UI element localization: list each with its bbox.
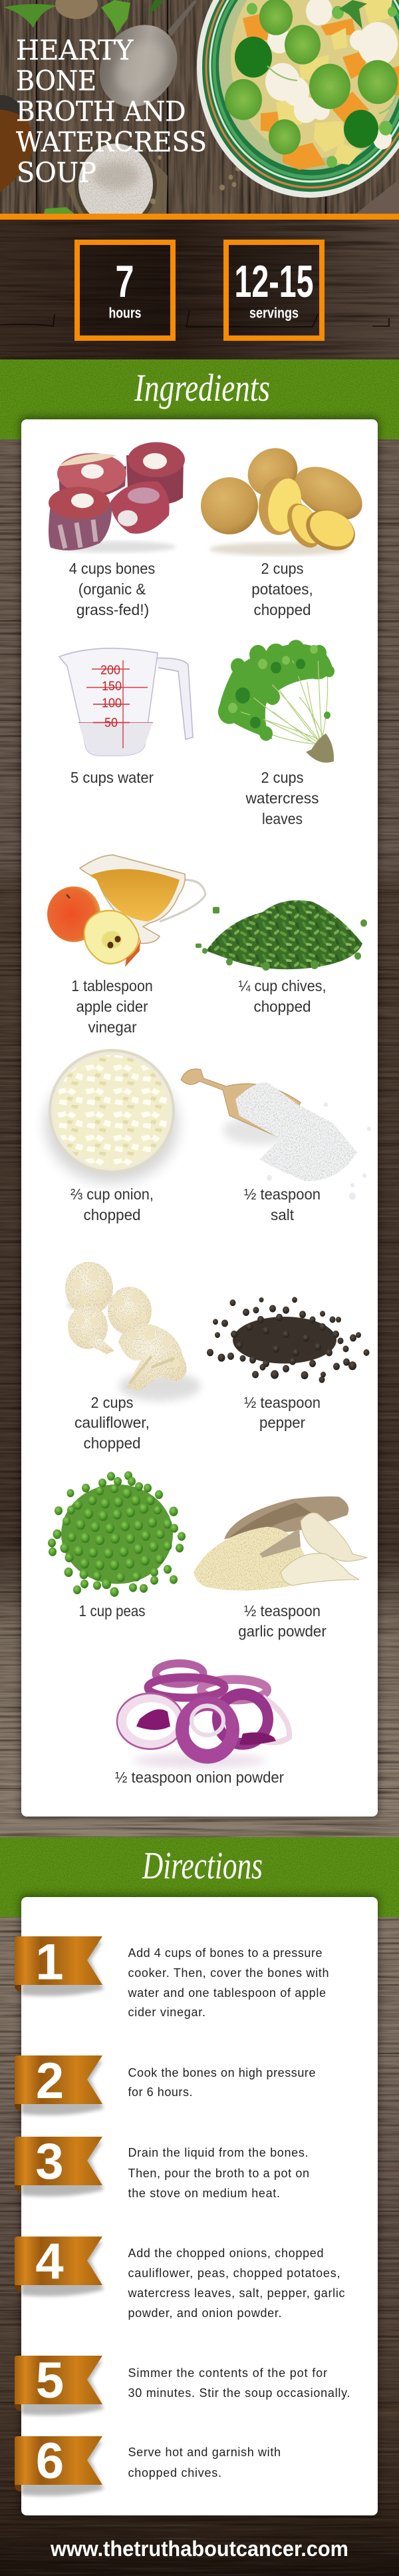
label: watercress xyxy=(245,769,319,827)
banner: directions xyxy=(0,1837,399,1917)
ribbon 6: 6 xyxy=(36,2433,64,2489)
icon: potatoes xyxy=(201,441,370,557)
panel shadow xyxy=(20,1894,379,2517)
stat box: servings: 12-15 xyxy=(234,256,314,307)
label: watercress: watercress xyxy=(245,789,319,807)
ingredient: chives xyxy=(196,900,367,1015)
step 5 xyxy=(15,2352,350,2416)
ribbon 5 xyxy=(15,2352,104,2416)
label: cauliflower: 2 cups xyxy=(90,1394,133,1411)
icon: peppercorns and salt scatter xyxy=(150,155,241,204)
label: water: 5 cups water xyxy=(70,769,154,786)
ribbon 2 xyxy=(15,2053,104,2115)
step 6 text: chopped chives. xyxy=(128,2466,221,2479)
title: BROTH AND xyxy=(16,96,186,128)
title: WATERCRESS xyxy=(16,126,207,158)
icon: scoop of salt xyxy=(181,1069,371,1199)
label: cauliflower xyxy=(74,1394,150,1452)
icon: linen cloth xyxy=(356,180,399,214)
label: garlic powder xyxy=(238,1602,327,1640)
banner: ingredients: Ingredients xyxy=(134,366,270,409)
icon: cauliflower florets xyxy=(65,1262,201,1401)
label: cauliflower: chopped xyxy=(84,1434,141,1452)
step 3 text: Drain the liquid from the bones. xyxy=(128,2146,309,2159)
stat box: servings xyxy=(226,242,322,338)
ingredient: watercress xyxy=(218,640,334,827)
icon: watercress xyxy=(218,640,334,763)
label: potatoes xyxy=(251,560,313,618)
stat box: time: 7 xyxy=(116,256,134,307)
label: pepper xyxy=(244,1394,321,1431)
ribbon 1: 1 xyxy=(35,1934,64,1990)
ingredient: apple cider vinegar xyxy=(47,855,205,1036)
icon: green peas xyxy=(48,1471,186,1597)
ingredient: cauliflower xyxy=(65,1262,201,1452)
ribbon 2: 2 xyxy=(36,2053,64,2109)
watercress leaves xyxy=(225,0,398,154)
label: onion: chopped xyxy=(84,1206,141,1223)
step 2 xyxy=(15,2053,315,2115)
stat box: servings: servings xyxy=(249,305,299,321)
label: vinegar: 1 tablespoon xyxy=(71,977,153,994)
panel: ingredients xyxy=(21,419,378,1817)
ingredient: garlic powder xyxy=(194,1496,367,1640)
step 4 xyxy=(15,2233,344,2320)
ribbon 3 xyxy=(15,2133,104,2197)
ribbon 4: 4 xyxy=(35,2233,64,2290)
label: watercress: 2 cups xyxy=(261,769,303,786)
ingredient: bones xyxy=(49,442,185,618)
icon: wooden handle at left xyxy=(0,95,33,192)
ingredient: pepper xyxy=(207,1297,370,1431)
ingredient: water xyxy=(59,648,193,786)
label: onion powder: ½ teaspoon onion powder xyxy=(115,1769,284,1786)
label: salt: ½ teaspoon xyxy=(244,1185,321,1203)
icon: measuring cup: 50 xyxy=(104,716,118,730)
label: salt xyxy=(244,1185,321,1223)
step 4 text: cauliflower, peas, chopped potatoes, xyxy=(128,2266,340,2280)
step 4 text xyxy=(128,2247,344,2320)
step 2 text: Cook the bones on high pressure xyxy=(128,2066,315,2079)
step 6 text xyxy=(128,2446,281,2479)
label: onion: ⅔ cup onion, xyxy=(70,1185,154,1203)
label: salt: salt xyxy=(271,1206,295,1223)
icon: red onion rings xyxy=(117,1663,289,1768)
step 4 text: watercress leaves, salt, pepper, garlic xyxy=(128,2286,344,2300)
ribbon 6 xyxy=(15,2433,104,2496)
soup vegetables xyxy=(225,0,399,170)
label: potatoes: potatoes, xyxy=(251,580,313,598)
icon: garlic powder and cloves xyxy=(194,1496,367,1591)
label: potatoes: 2 cups xyxy=(261,560,303,577)
icon: salt bowl xyxy=(66,139,168,214)
step 4 text: powder, and onion powder. xyxy=(128,2306,282,2320)
label: pepper: pepper xyxy=(259,1414,305,1431)
step 4 text: Add the chopped onions, chopped xyxy=(128,2247,323,2260)
step 5 text xyxy=(128,2366,350,2400)
label: chives: chopped xyxy=(254,998,311,1015)
panel: directions xyxy=(15,1897,378,2515)
step 3 text: the stove on medium heat. xyxy=(128,2187,280,2200)
panel shadow xyxy=(20,417,379,1818)
icon: chopped chives xyxy=(196,900,367,970)
icon: parsley sprigs xyxy=(3,0,164,214)
label: cauliflower: cauliflower, xyxy=(74,1414,150,1431)
icon: soup bowl xyxy=(197,0,399,198)
ingredient: onion powder xyxy=(115,1663,289,1786)
label: garlic powder: ½ teaspoon xyxy=(244,1602,321,1619)
label: vinegar: apple cider xyxy=(76,998,148,1015)
step 5 text: Simmer the contents of the pot for xyxy=(128,2366,327,2380)
step 2 text: for 6 hours. xyxy=(128,2085,193,2099)
step 1 text: cooker. Then, cover the bones with xyxy=(128,1966,329,1980)
step 1 text: water and one tablespoon of apple xyxy=(128,1986,326,2000)
step 1 text: cider vinegar. xyxy=(128,2006,205,2019)
label: peas: 1 cup peas xyxy=(78,1602,145,1619)
icon: measuring cup xyxy=(59,648,193,755)
icon: spoon xyxy=(100,0,197,107)
icon: bowl of chopped onion xyxy=(45,1049,178,1183)
stat box: time xyxy=(77,242,173,338)
icon: oxtail bones xyxy=(49,442,185,552)
step 2 text xyxy=(128,2066,315,2099)
title xyxy=(16,35,207,189)
banner: directions: Directions xyxy=(142,1844,263,1887)
step 1 text xyxy=(128,1946,329,2019)
label: bones xyxy=(69,560,155,618)
label: bones: 4 cups bones xyxy=(69,560,155,577)
title: HEARTY xyxy=(16,35,134,67)
label: chives xyxy=(238,977,326,1015)
footer url: www.thetruthaboutcancer.com xyxy=(50,2537,348,2561)
stat box: time: hours xyxy=(109,305,141,321)
step 6 xyxy=(15,2433,281,2496)
label: vinegar xyxy=(71,977,153,1036)
ribbon 3: 3 xyxy=(35,2133,64,2190)
ribbon 1 xyxy=(15,1934,104,1996)
icon: vinegar boat and apples xyxy=(47,855,205,967)
label: watercress: leaves xyxy=(262,810,303,827)
step 3 xyxy=(15,2133,309,2200)
label: chives: ¼ cup chives, xyxy=(238,977,326,994)
ingredient: onion xyxy=(45,1049,178,1223)
panel: stats xyxy=(0,220,399,359)
icon: black peppercorns xyxy=(207,1297,370,1383)
banner: ingredients xyxy=(0,359,399,439)
label: bones: (organic & xyxy=(78,580,146,598)
ingredient: peas xyxy=(48,1471,186,1619)
title: SOUP xyxy=(17,157,96,189)
icon: nut shell xyxy=(55,0,98,19)
ingredient: potatoes xyxy=(201,441,370,618)
ribbon 5: 5 xyxy=(36,2352,64,2409)
orange divider xyxy=(0,214,399,220)
label: bones: grass-fed!) xyxy=(76,601,149,618)
hero photo xyxy=(0,0,399,230)
label: pepper: ½ teaspoon xyxy=(244,1394,321,1411)
ribbon 4 xyxy=(15,2233,104,2296)
icon: measuring cup: 200 xyxy=(100,663,120,678)
label: potatoes: chopped xyxy=(254,601,311,618)
step 1 xyxy=(15,1934,329,2019)
step 3 text xyxy=(128,2146,309,2200)
step 3 text: Then, pour the broth to a pot on xyxy=(128,2167,309,2180)
label: garlic powder: garlic powder xyxy=(238,1623,327,1640)
icon: measuring cup: 150 xyxy=(102,679,122,694)
label: vinegar: vinegar xyxy=(88,1018,137,1036)
step 6 text: Serve hot and garnish with xyxy=(128,2446,281,2459)
title: BONE xyxy=(16,65,96,97)
label: onion xyxy=(70,1185,154,1223)
icon: measuring cup: 100 xyxy=(102,696,122,711)
step 5 text: 30 minutes. Stir the soup occasionally. xyxy=(128,2386,350,2400)
step 1 text: Add 4 cups of bones to a pressure xyxy=(128,1946,322,1960)
ingredient: salt xyxy=(181,1069,371,1223)
